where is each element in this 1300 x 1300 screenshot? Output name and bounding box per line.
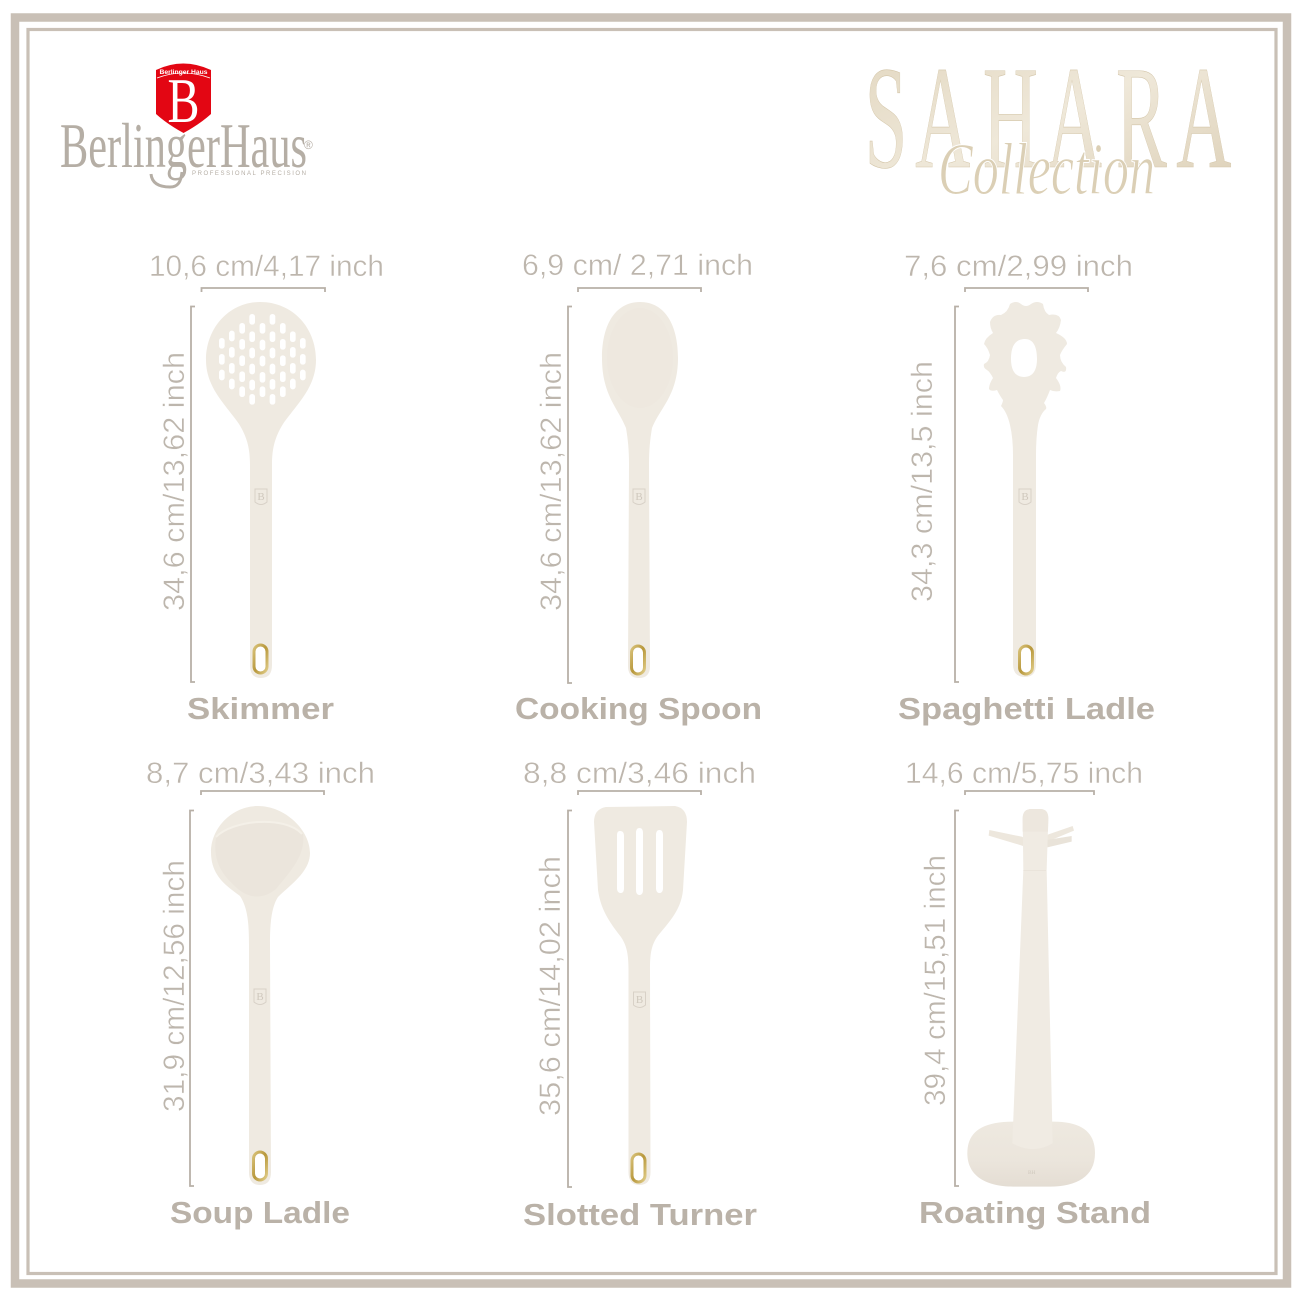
- ladle utensil: [211, 806, 310, 1185]
- ladle utensil: B: [256, 991, 264, 1003]
- height label: 39,4 cm/15,51 inch: [919, 855, 952, 1106]
- height label: 34,6 cm/13,62 inch: [535, 352, 568, 611]
- height label: 31,9 cm/12,56 inch: [158, 860, 191, 1112]
- heading: Collection: Collection: [938, 129, 1155, 211]
- width label: 6,9 cm/ 2,71 inch: [522, 249, 753, 282]
- collection logo: Sahara Collection: [865, 38, 1231, 211]
- panel: slotted turner: [523, 757, 757, 1232]
- tagline: PROFESSIONAL PRECISION: [192, 171, 306, 177]
- heading: SAHARA: SAHARA: [865, 38, 1231, 200]
- turner utensil: B: [636, 994, 643, 1006]
- height bracket: [191, 306, 195, 682]
- panel: cooking spoon: [515, 249, 762, 726]
- icon: red shield: Berlinger Haus: [160, 69, 208, 76]
- height bracket: [955, 810, 959, 1186]
- width label: 8,7 cm/3,43 inch: [146, 757, 375, 790]
- width bracket: [965, 288, 1088, 292]
- name: Soup Ladle: [170, 1195, 350, 1230]
- registered mark: ®: [304, 138, 313, 152]
- width bracket: [578, 288, 701, 292]
- skimmer utensil: [206, 302, 316, 678]
- brand logo: Berlinger Haus: [60, 64, 313, 187]
- spoon utensil: [602, 302, 678, 678]
- panel: soup ladle: [146, 757, 375, 1230]
- panel: skimmer: [149, 250, 384, 726]
- icon: red shield: B: [168, 65, 200, 136]
- stand utensil: [967, 809, 1095, 1187]
- width bracket: [202, 288, 325, 292]
- spoon utensil: B: [635, 491, 643, 503]
- wordmark swoosh: [151, 172, 182, 187]
- width label: 14,6 cm/5,75 inch: [905, 757, 1143, 790]
- height label: 34,6 cm/13,62 inch: [158, 352, 191, 611]
- spaghetti utensil: [984, 302, 1067, 677]
- height bracket: [955, 306, 959, 682]
- width label: 7,6 cm/2,99 inch: [904, 250, 1133, 283]
- name: Skimmer: [187, 691, 334, 726]
- name: Slotted Turner: [523, 1197, 757, 1232]
- height label: 35,6 cm/14,02 inch: [534, 856, 567, 1116]
- width label: 8,8 cm/3,46 inch: [523, 757, 756, 790]
- stand utensil: BH: [1028, 1170, 1036, 1176]
- height bracket: [568, 306, 572, 683]
- width bracket: [578, 791, 701, 795]
- height label: 34,3 cm/13,5 inch: [906, 361, 939, 602]
- panel: spaghetti ladle: [898, 250, 1155, 726]
- name: Cooking Spoon: [515, 691, 762, 726]
- name: Roating Stand: [919, 1195, 1151, 1230]
- wordmark: BerlingerHaus: [60, 110, 307, 181]
- height bracket: [190, 810, 194, 1186]
- turner utensil: [594, 806, 687, 1185]
- height bracket: [568, 810, 572, 1187]
- name: Spaghetti Ladle: [898, 691, 1155, 726]
- panel: rotating stand: [905, 757, 1151, 1230]
- width bracket: [965, 791, 1094, 795]
- width bracket: [201, 791, 324, 795]
- width label: 10,6 cm/4,17 inch: [149, 250, 384, 283]
- spaghetti utensil: B: [1021, 491, 1029, 503]
- skimmer utensil: B: [257, 491, 265, 503]
